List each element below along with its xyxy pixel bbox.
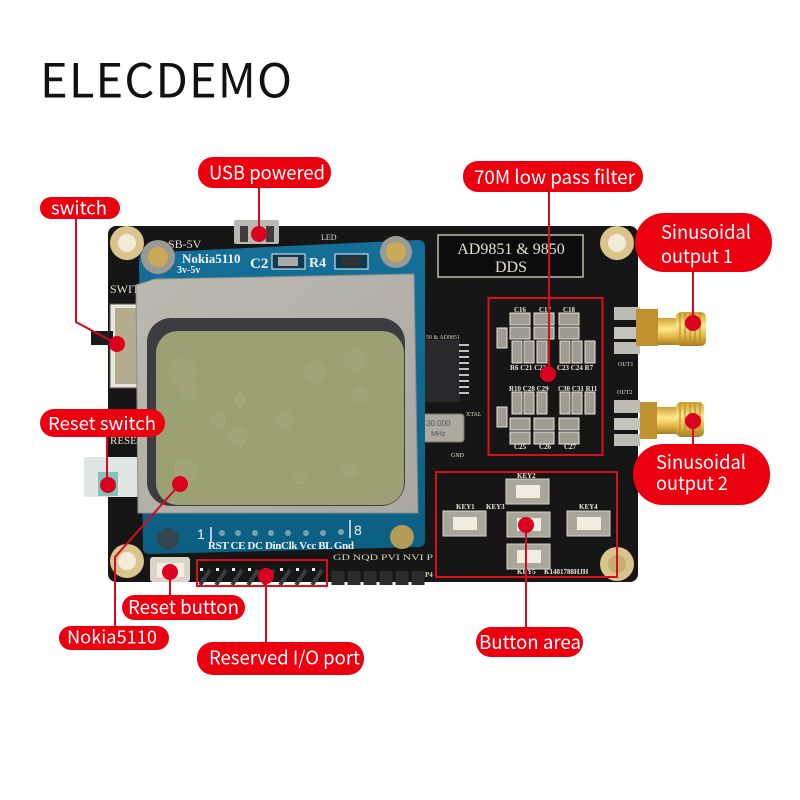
standoff screws [141, 236, 412, 274]
callout: Reset button [122, 564, 245, 620]
pin headers: GD NQD PVI NVI P [333, 552, 433, 562]
callout: Sinusoidal output 1 [635, 213, 772, 331]
callout: Reset switch [40, 409, 165, 493]
board heading: AD9851 and 9850 DDS [438, 235, 583, 277]
pin headers: P4 [425, 571, 433, 579]
callout: USB powered: USB powered [209, 158, 325, 186]
pin row [157, 520, 414, 552]
SMA connector: output 2 [614, 390, 704, 446]
slide switch [91, 304, 141, 388]
callout: Reserved I/O port [197, 560, 364, 675]
DDS chip and crystal: MHz [431, 431, 446, 438]
filter components: C25 [514, 443, 527, 451]
callout: Reset switch: Reset switch [48, 410, 156, 436]
callout: Button area: Button area [479, 628, 581, 655]
DDS chip and crystal: XTAL [466, 412, 482, 418]
filter components: C18 [563, 306, 576, 314]
push buttons [443, 472, 610, 576]
pin headers [200, 552, 433, 585]
push buttons: KEY3 [486, 503, 505, 511]
push buttons: KEY4 [579, 503, 598, 511]
callout: Reserved I/O port: Reserved I/O port [209, 644, 360, 670]
callout: Sinusoidal output 1: output 1 [661, 242, 733, 269]
push buttons: K1481788HJH [544, 568, 589, 576]
filter components: C16 [514, 306, 527, 314]
callout: Reset button: Reset button [128, 593, 239, 620]
filter components: C26 [539, 443, 552, 451]
callout: Nokia5110: Nokia5110 [67, 624, 157, 650]
mounting holes [110, 226, 634, 581]
metal frame [136, 274, 418, 513]
callout: Sinusoidal output 2: Sinusoidal [656, 448, 746, 475]
module text: R4 [309, 256, 326, 271]
callout: 70M low pass filter: 70M low pass filter [474, 163, 636, 190]
filter components: C27 [564, 443, 577, 451]
reset button part [150, 557, 190, 582]
callout: Sinusoidal output 2: output 2 [656, 469, 728, 496]
push buttons: KEY2 [517, 472, 536, 480]
filter components: R6 C21 C22 [510, 364, 547, 372]
filter components: C30 C31 R11 [558, 385, 598, 393]
module text: Nokia5110 [182, 251, 241, 266]
LCD screen [147, 318, 405, 506]
push buttons: KEY1 [456, 503, 475, 511]
Nokia5110 display module [136, 236, 425, 554]
callout: Button area [436, 472, 617, 657]
module text: 3v-5v [177, 265, 200, 276]
push buttons: KEY5 [517, 568, 536, 576]
callout: Nokia5110 [59, 476, 188, 650]
callout: switch: switch [51, 194, 107, 220]
board labels [110, 233, 337, 447]
board labels: SB-5V [168, 237, 202, 251]
blue PCB [139, 240, 425, 554]
callout: Sinusoidal output 1: Sinusoidal [661, 218, 751, 245]
module text: C2 [250, 256, 268, 272]
filter components: R10 C28 C29 [509, 385, 549, 393]
DDS chip and crystal: 50 & AD9851 [426, 335, 460, 341]
SMA connector: output 2: OUT2 [617, 390, 632, 396]
LCD blotches [168, 348, 368, 485]
DDS chip and crystal [420, 335, 482, 459]
DDS chip and crystal: 30.000 [426, 419, 451, 428]
pin row: 1 [197, 526, 205, 542]
module text [177, 251, 368, 276]
filter components: C17 [539, 306, 552, 314]
reset switch part [84, 457, 138, 497]
board labels: RESE [110, 435, 137, 447]
callout: USB powered [198, 157, 331, 242]
SMA connector: output 1 [614, 307, 706, 368]
board labels: SWIT [110, 282, 140, 296]
USB connector [234, 220, 279, 244]
title: ELECDEMO [40, 42, 292, 112]
board heading: AD9851 and 9850 DDS: DDS [495, 259, 527, 276]
callout: switch [40, 194, 125, 352]
board labels: LED [321, 233, 337, 242]
SMA connector: output 1: OUT1 [618, 362, 633, 368]
filter components: C23 C24 R7 [557, 364, 594, 372]
pin row: RST CE DC DinClk Vcc BL Gnd [208, 540, 354, 552]
filter components [497, 306, 598, 451]
pin row: 8 [354, 522, 362, 538]
callout: 70M low pass filter [463, 161, 643, 455]
circuit board [84, 220, 706, 585]
board heading: AD9851 and 9850 DDS: AD9851 & 9850 [457, 241, 565, 258]
callout: Sinusoidal output 2 [633, 413, 770, 505]
DDS chip and crystal: GND [451, 453, 465, 459]
